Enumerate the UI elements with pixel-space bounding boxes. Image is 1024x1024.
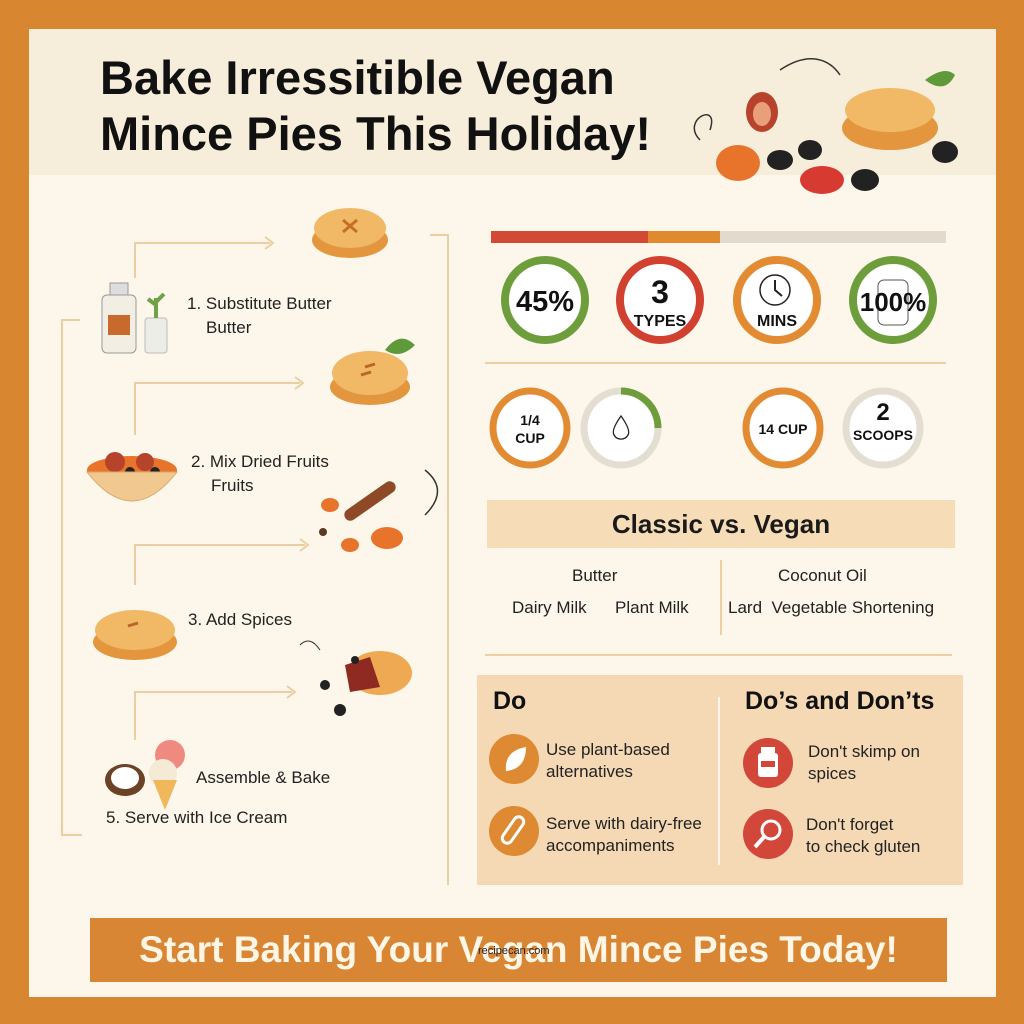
comparison table: Lard Vegetable Shortening	[728, 598, 934, 617]
classic vs vegan heading: Classic vs. Vegan	[612, 509, 830, 539]
heading: do: Do	[493, 687, 526, 715]
stat: 1/4 cup: 1/4	[520, 412, 540, 428]
step 1: substitute butter	[102, 208, 388, 354]
comparison table	[512, 560, 934, 635]
step 3: add spices	[93, 610, 412, 716]
icon: pie	[312, 208, 388, 258]
stat: water drop	[584, 391, 658, 465]
header band	[29, 29, 996, 175]
stat: 1/4 cup	[493, 391, 567, 465]
icon: cut pie and raisins	[300, 640, 412, 716]
step 4/5: assemble and serve	[105, 740, 330, 827]
stat: 100%: 100%	[860, 287, 926, 317]
text: 3. Add Spices	[188, 610, 292, 629]
do item 2: accompaniments	[546, 836, 675, 855]
comparison table: Dairy Milk	[512, 598, 587, 617]
watermark: recipecan.com	[478, 945, 550, 957]
step 2: mix dried fruits	[86, 338, 438, 552]
stat: 2 scoops: SCOOPS	[853, 427, 913, 443]
title	[100, 51, 651, 160]
do item 2	[489, 806, 702, 856]
stat: 3 types: TYPES	[634, 313, 687, 330]
stat circles row 2	[490, 388, 924, 468]
call to action banner: Start Baking Your Vegan Mince Pies Today!	[139, 929, 898, 970]
comparison table: Butter	[572, 566, 617, 585]
do's and don'ts panel	[477, 675, 963, 885]
comparison table: Plant Milk	[615, 598, 689, 617]
progress bar	[491, 231, 946, 243]
icon: bottle and plant	[102, 282, 168, 354]
icon: pie with leaf	[330, 338, 415, 405]
heading: do's and don'ts: Do’s and Don’ts	[745, 687, 934, 715]
stat circles row 1	[501, 256, 937, 344]
icon: pie	[93, 610, 177, 660]
don't item 1: spices	[808, 764, 856, 783]
classic vs vegan heading	[487, 500, 955, 548]
stat: 45%	[505, 260, 585, 340]
text: Assemble & Bake	[196, 768, 330, 787]
don't item 2: Don't forget	[806, 815, 893, 834]
don't item 2	[743, 809, 920, 859]
icon: cinnamon and apricots	[319, 469, 438, 552]
do item 2: Serve with dairy-free	[546, 814, 702, 833]
call to action banner	[90, 918, 947, 982]
don't item 1: Don't skimp on	[808, 742, 920, 761]
comparison table: Coconut Oil	[778, 566, 867, 585]
stat: mins	[737, 260, 817, 340]
step 4/5: assemble and serve: 5. Serve with Ice Cream	[106, 808, 287, 827]
do item 1	[489, 734, 670, 784]
stat: 3 types	[620, 260, 700, 340]
step 2: mix dried fruits: Fruits	[211, 476, 254, 495]
stat: 2 scoops: 2	[876, 399, 890, 426]
don't item 2: to check gluten	[806, 837, 920, 856]
stat: 45%: 45%	[516, 286, 574, 318]
stat: mins: MINS	[757, 313, 797, 330]
stat: 2 scoops	[846, 391, 920, 465]
step 1: substitute butter: Butter	[206, 318, 251, 337]
do item 1: alternatives	[546, 762, 633, 781]
text: 2. Mix Dried Fruits	[191, 452, 329, 471]
icon: coconut and ice cream	[105, 740, 185, 810]
stat: 100%	[853, 260, 933, 340]
don't item 1	[743, 738, 920, 788]
stat: 1/4 cup: CUP	[515, 430, 545, 446]
title: Bake Irressitible Vegan	[100, 51, 615, 104]
header illustration: fruits and pie	[694, 58, 958, 194]
left flow connector lines	[61, 234, 449, 885]
icon: fruit bowl	[86, 452, 178, 502]
title: Mince Pies This Holiday!	[100, 107, 651, 160]
stat: 14 cup: 14 CUP	[758, 421, 808, 437]
stat: 3 types: 3	[651, 274, 669, 310]
stat: 14 cup	[746, 391, 820, 465]
do item 1: Use plant-based	[546, 740, 670, 759]
text: 1. Substitute Butter	[187, 294, 332, 313]
